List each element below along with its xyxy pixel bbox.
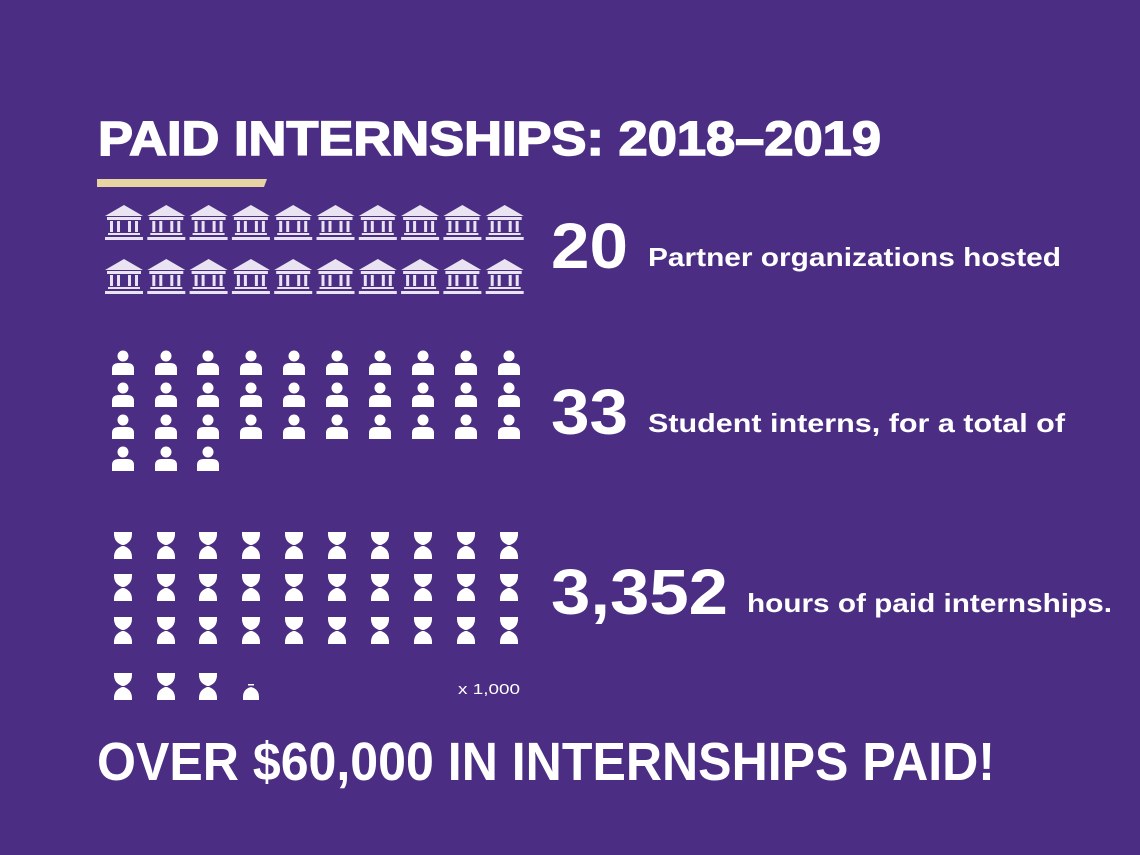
stat: partner organizations: Partner organizations hosted xyxy=(648,242,1061,272)
stat: hours: 3,352 xyxy=(551,556,728,628)
stat: partner organizations xyxy=(551,210,1061,282)
icon grid: people xyxy=(112,350,520,471)
stat: hours xyxy=(551,556,1112,628)
icon grid: hourglasses xyxy=(114,532,518,700)
stat: partner organizations: 20 xyxy=(551,210,628,282)
gold underline xyxy=(97,179,267,187)
stat: student interns xyxy=(551,376,1065,448)
stat: hours: hours of paid internships. xyxy=(747,588,1112,618)
scale note: x 1,000 xyxy=(458,681,520,698)
icon grid: buildings xyxy=(105,205,524,294)
stat: student interns: Student interns, for a total of xyxy=(648,408,1065,438)
bottom headline: OVER $60,000 IN INTERNSHIPS PAID! xyxy=(97,732,995,792)
stat: student interns: 33 xyxy=(551,376,628,448)
title: PAID INTERNSHIPS: 2018–2019 xyxy=(98,113,881,166)
